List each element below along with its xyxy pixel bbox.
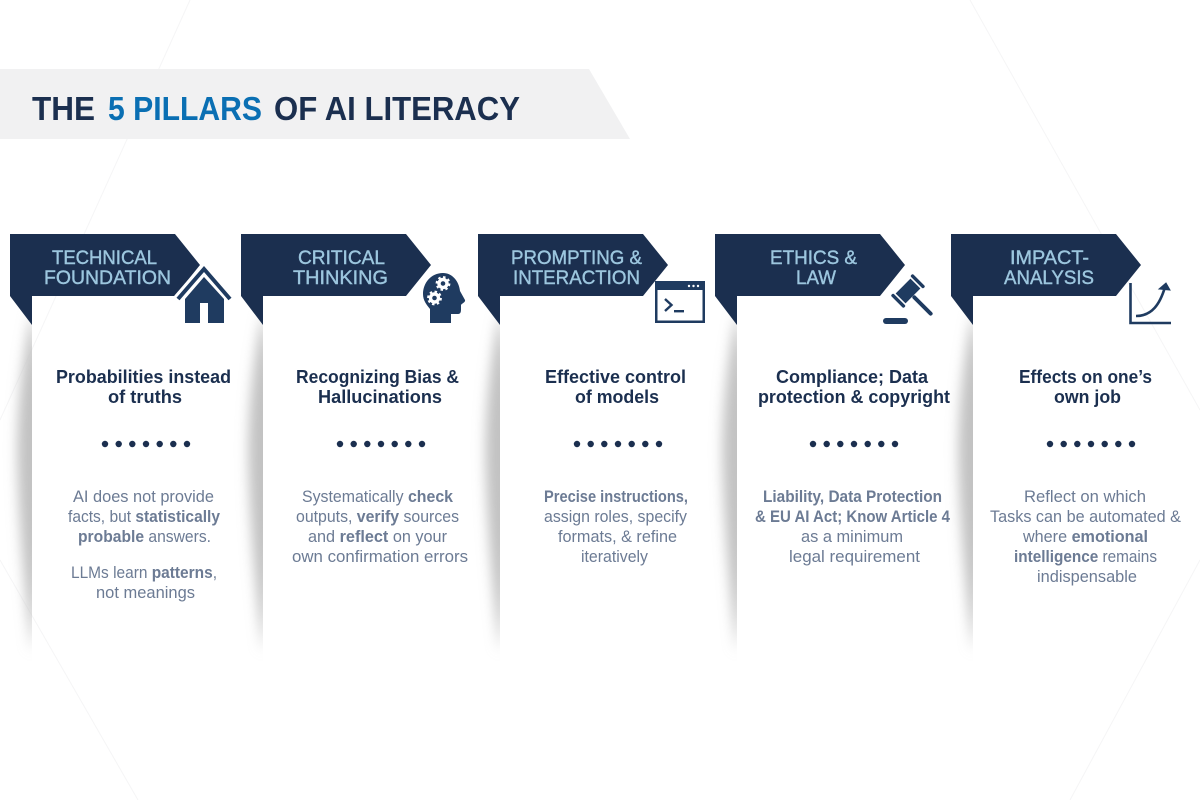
heading 5: Effects on one’s [1019, 366, 1152, 387]
ribbon label 5: ANALYSIS [1004, 268, 1094, 289]
body text 1: LLMs learn patterns, [71, 564, 217, 582]
title: THE [32, 90, 95, 127]
heading 5 [1019, 366, 1152, 407]
ribbon label 3 [511, 248, 642, 289]
ribbon label 5 [1004, 248, 1094, 289]
body text 1: facts, but statistically [68, 508, 221, 526]
body text 4: & EU AI Act; Know Article 4 [755, 508, 951, 526]
heading 5: own job [1054, 386, 1121, 407]
pillar 1: technical foundation [10, 234, 231, 602]
icon: house [178, 269, 230, 323]
ribbon label 1 [44, 248, 171, 289]
pillar 4: ethics and law [715, 234, 951, 566]
title banner [0, 69, 630, 139]
ribbon 3 [478, 234, 668, 325]
heading 2: Recognizing Bias & [296, 366, 459, 387]
heading 3: Effective control [545, 366, 686, 387]
body text 2: Systematically check [302, 488, 454, 506]
body text 1: probable answers. [78, 528, 211, 546]
ribbon label 1: FOUNDATION [44, 268, 171, 289]
body text 2: and reflect on your [308, 528, 447, 546]
heading 2: Hallucinations [318, 386, 442, 407]
ribbon 4 [715, 234, 905, 325]
title: OF AI LITERACY [274, 90, 520, 127]
icon: growth chart [1130, 283, 1171, 323]
body text 5: Reflect on which [1024, 488, 1146, 506]
heading 1 [56, 366, 231, 407]
body text 3: assign roles, specify [544, 508, 688, 526]
heading 4: protection & copyright [758, 386, 950, 407]
body text 4 [755, 488, 951, 566]
pillar 5: impact analysis [951, 234, 1181, 586]
ribbon 2 [241, 234, 431, 325]
body text 4: legal requirement [789, 548, 920, 566]
pillar 2: critical thinking [241, 234, 468, 566]
body text 2 [292, 488, 468, 566]
ribbon label 3: PROMPTING & [511, 248, 642, 269]
body text 5: intelligence remains [1014, 548, 1157, 566]
ribbon 1 [10, 234, 200, 325]
dots 4 [810, 441, 898, 447]
heading 4: Compliance; Data [776, 366, 929, 387]
heading 4 [758, 366, 950, 407]
ribbon label 4 [770, 248, 857, 289]
body text 4: as a minimum [801, 528, 903, 546]
pillar 3: prompting and interaction [478, 234, 705, 566]
title [32, 90, 520, 127]
ribbon 5 [951, 234, 1141, 325]
body text 5: Tasks can be automated & [990, 508, 1181, 526]
title: 5 PILLARS [108, 90, 262, 127]
body text 5 [990, 488, 1181, 586]
heading 1: Probabilities instead [56, 366, 231, 387]
dots 2 [337, 441, 425, 447]
body text 2: outputs, verify sources [296, 508, 459, 526]
body text 3 [544, 488, 688, 566]
body text 5: indispensable [1037, 568, 1137, 586]
body text 3: Precise instructions, [544, 488, 688, 506]
icon: gavel [883, 274, 943, 326]
ribbon label 4: ETHICS & [770, 248, 857, 269]
body text 1: AI does not provide [73, 488, 214, 506]
body text 3: iteratively [581, 548, 649, 566]
ribbon label 1: TECHNICAL [52, 248, 157, 269]
body text 3: formats, & refine [558, 528, 677, 546]
ribbon label 3: INTERACTION [513, 268, 640, 289]
icon: terminal window [655, 281, 705, 323]
icon: head with gears [423, 273, 465, 323]
ribbon label 2: THINKING [293, 268, 388, 289]
ribbon label 4: LAW [796, 268, 836, 289]
dots 1 [102, 441, 190, 447]
dots 3 [574, 441, 662, 447]
heading 3: of models [575, 386, 659, 407]
heading 1: of truths [108, 386, 182, 407]
heading 3 [545, 366, 686, 407]
body text 1: not meanings [96, 584, 195, 602]
ribbon label 2 [293, 248, 388, 289]
body text 2: own confirmation errors [292, 548, 468, 566]
ribbon label 5: IMPACT- [1010, 248, 1089, 269]
dots 5 [1047, 441, 1135, 447]
body text 1 [68, 488, 221, 602]
ribbon label 2: CRITICAL [298, 248, 385, 269]
body text 4: Liability, Data Protection [763, 488, 942, 506]
heading 2 [296, 366, 459, 407]
body text 5: where emotional [1022, 528, 1148, 546]
